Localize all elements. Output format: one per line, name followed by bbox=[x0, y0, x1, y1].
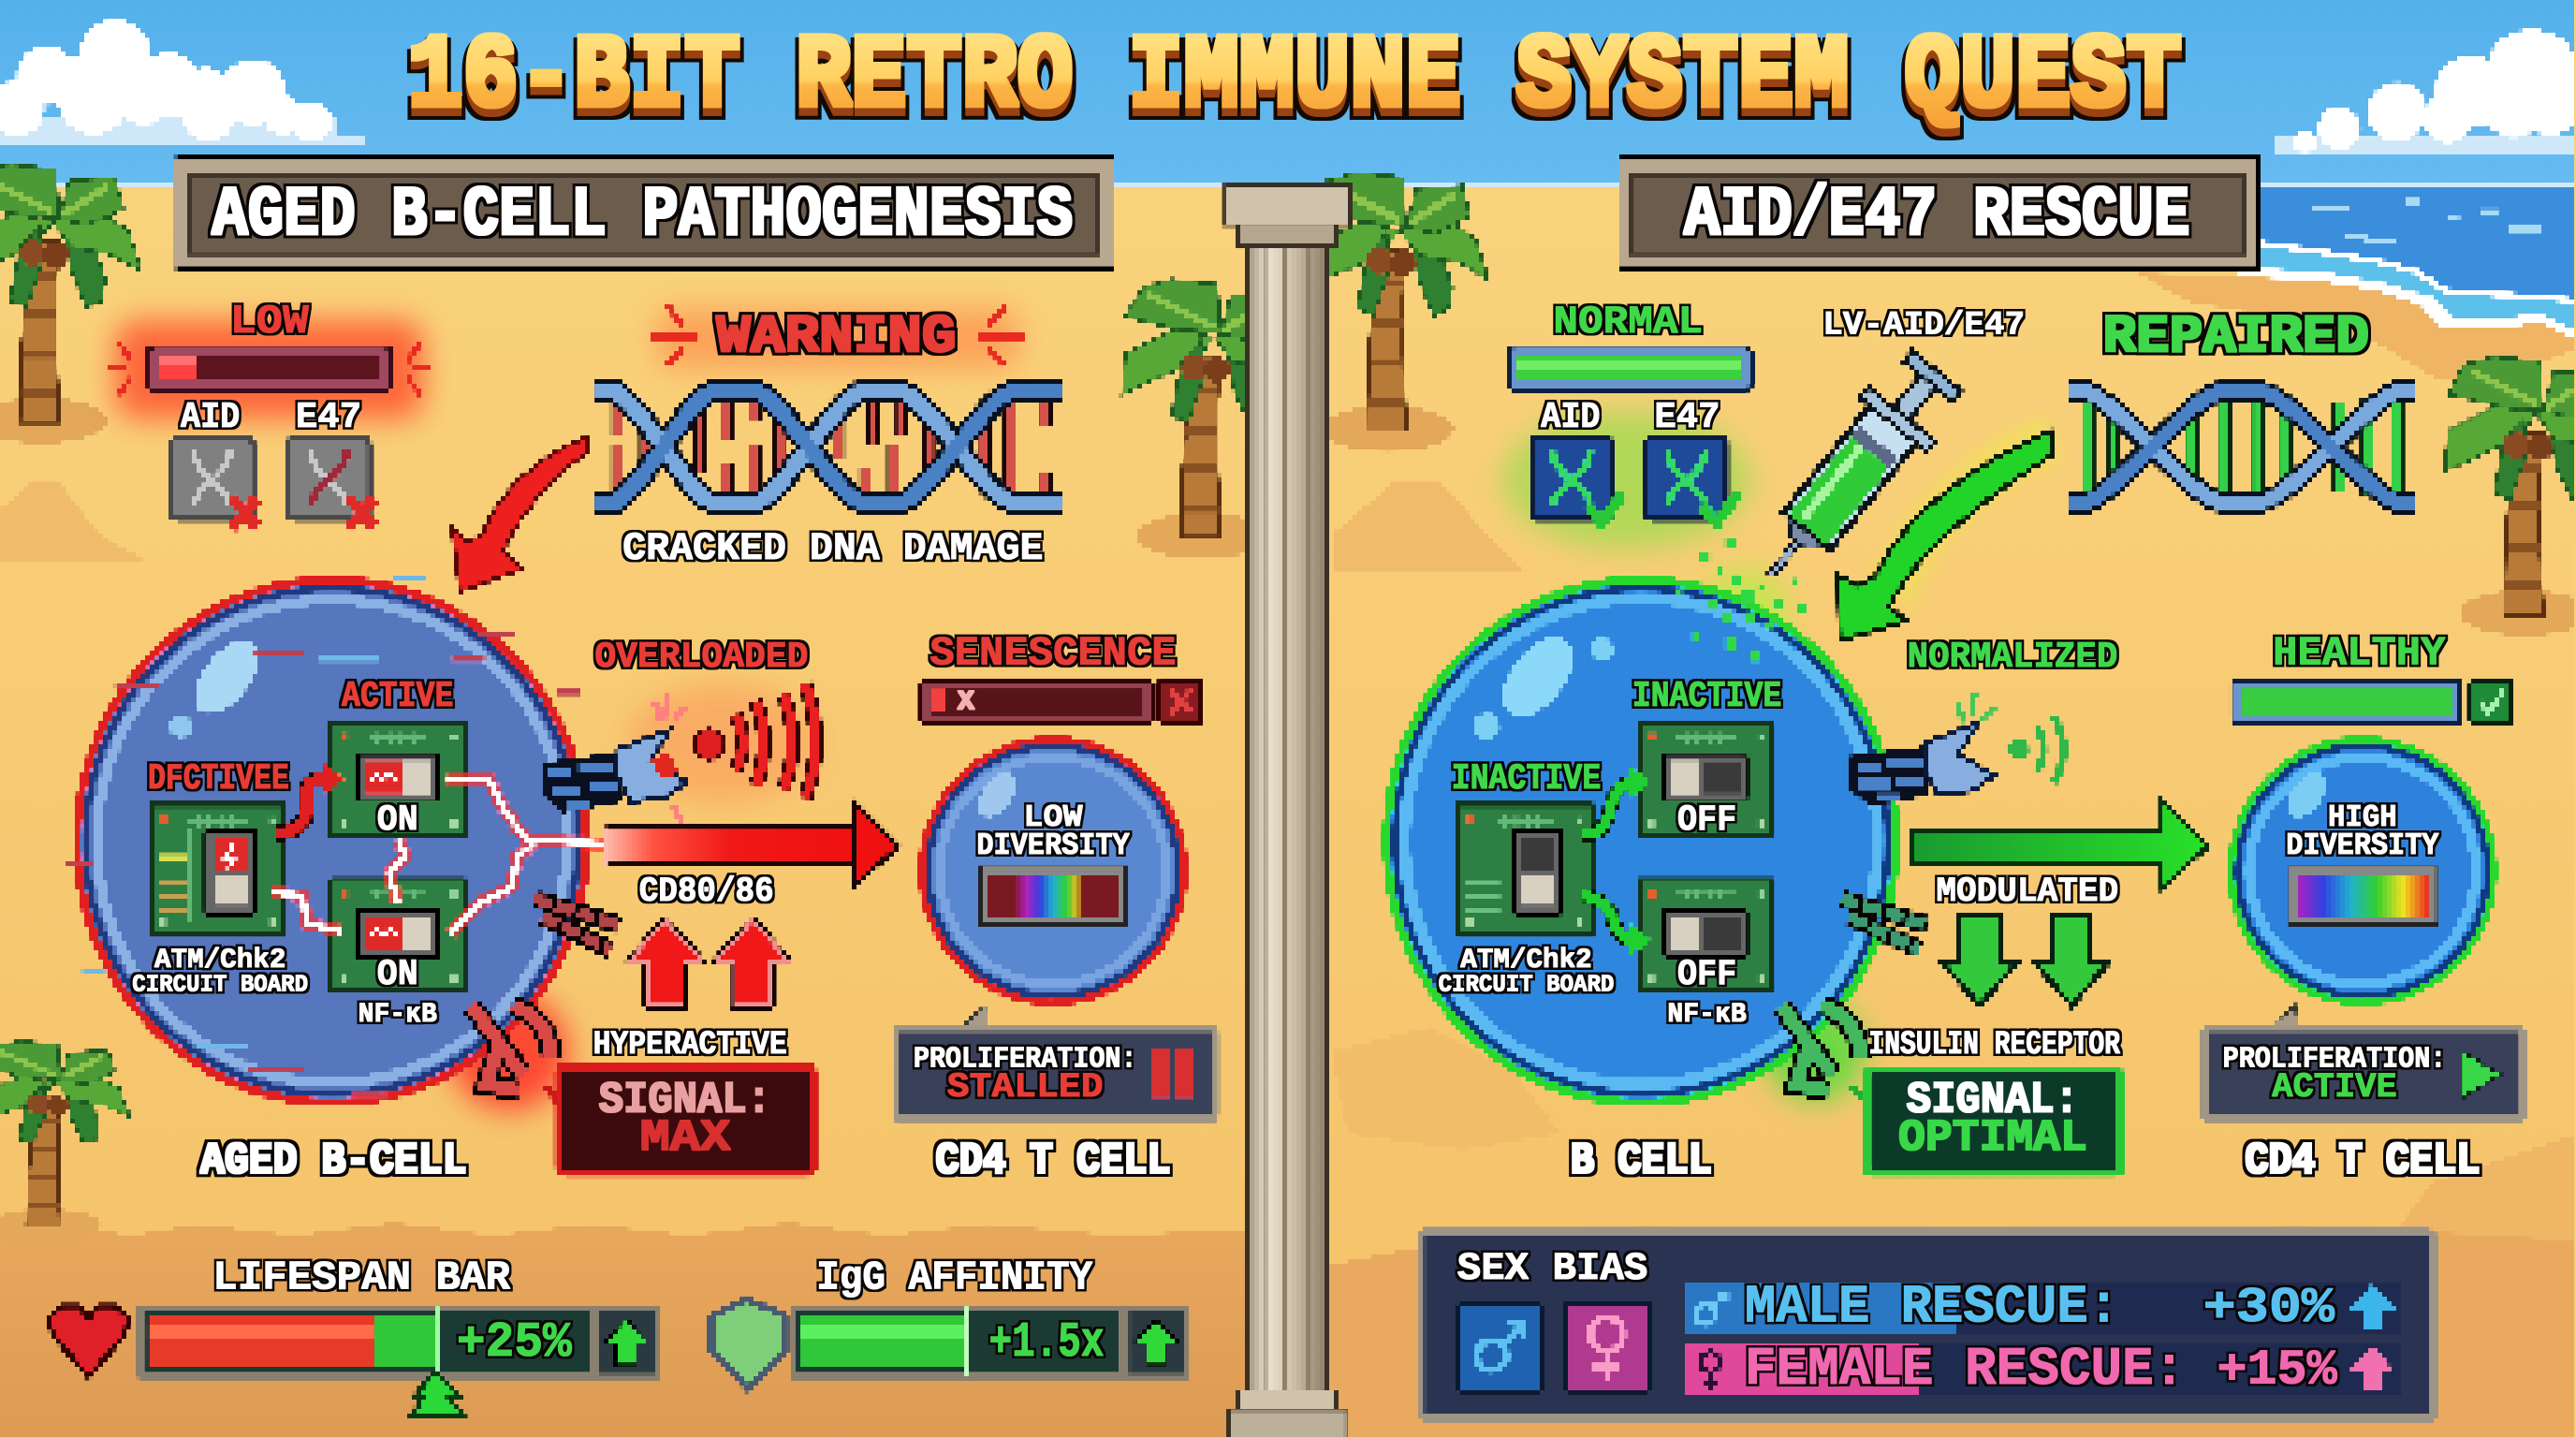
glow: warning bbox=[657, 309, 1018, 368]
cloud left bbox=[0, 20, 365, 144]
glow: restored genes bbox=[1503, 411, 1749, 549]
label: on top: ON bbox=[377, 800, 418, 841]
label: lifespan bar: LIFESPAN BAR bbox=[212, 1255, 511, 1301]
label: e47 right: E47 bbox=[1654, 397, 1720, 438]
circuit board: active on bbox=[329, 721, 468, 838]
icon: e47 gene restored bbox=[1647, 437, 1738, 522]
panel: sex bias bbox=[1421, 1232, 2433, 1418]
icon: aid gene restored bbox=[1531, 437, 1623, 522]
lifespan up indicator bbox=[594, 1308, 657, 1377]
label: b cell: B CELL bbox=[1571, 1137, 1712, 1186]
text: male rescue: MALE RESCUE: bbox=[1745, 1278, 2119, 1339]
label: cd4 t cell left: CD4 T CELL bbox=[936, 1137, 1171, 1186]
cloud right bbox=[2276, 30, 2576, 154]
icon: male bbox=[1459, 1303, 1541, 1392]
healthy cd4 t cell bbox=[2231, 740, 2494, 1003]
dna damage caption: CRACKED DNA DAMAGE bbox=[622, 526, 1043, 571]
receptor modulated bbox=[1841, 899, 1927, 949]
icon: e47 gene off bbox=[287, 437, 374, 527]
aged cd4 t cell bbox=[922, 740, 1184, 1003]
label: healthy: HEALTHY bbox=[2273, 631, 2446, 678]
label: circuit board right: CIRCUIT BOARD bbox=[1439, 970, 1614, 998]
circuit board: nf-kb on bbox=[329, 877, 468, 994]
palm tree top left bbox=[0, 165, 141, 444]
glow: hyperactive receptor bbox=[450, 992, 568, 1110]
pillar bbox=[1225, 185, 1351, 1438]
glow: low meter bbox=[115, 320, 424, 419]
label: cd80/86: CD80/86 bbox=[639, 873, 774, 912]
label: nf-kb right: NF-κB bbox=[1667, 998, 1747, 1030]
red up arrows bbox=[629, 920, 788, 1005]
green down arrows bbox=[1942, 917, 2110, 1005]
label: inactive top: INACTIVE bbox=[1632, 676, 1781, 717]
icon: aid gene off bbox=[171, 437, 258, 527]
label: low: LOW bbox=[230, 299, 310, 345]
text: low: LOW bbox=[1023, 800, 1083, 836]
ground strip left bbox=[0, 1223, 1249, 1438]
aged b-cell bbox=[66, 575, 587, 1103]
low gene expression meter bbox=[109, 342, 431, 394]
cracked dna bbox=[596, 389, 1061, 503]
glow: green arrow bbox=[1889, 437, 2054, 600]
lifespan bar bbox=[139, 1308, 592, 1377]
text: active: ACTIVE bbox=[2272, 1068, 2397, 1108]
label: circuit board: CIRCUIT BOARD bbox=[132, 970, 308, 998]
male rescue row bbox=[1684, 1284, 2402, 1332]
female rescue row bbox=[1684, 1344, 2402, 1397]
red curved arrow bbox=[452, 437, 588, 592]
big green arrow bbox=[1912, 801, 2208, 888]
syringe bbox=[1738, 344, 1969, 602]
text: proliferation left: PROLIFERATION: bbox=[914, 1044, 1137, 1077]
label: senescence: SENESCENCE bbox=[929, 631, 1177, 678]
lightning signal traces bbox=[271, 779, 618, 935]
senescence meter bbox=[922, 681, 1201, 723]
label: warning: WARNING bbox=[716, 307, 956, 367]
text: optimal: OPTIMAL bbox=[1898, 1114, 2087, 1164]
text: proliferation right: PROLIFERATION: bbox=[2223, 1044, 2446, 1077]
palm tree right of pillar bbox=[1308, 172, 1488, 452]
receptor cd80/86 left bbox=[534, 899, 620, 949]
text: diversity right: DIVERSITY bbox=[2286, 829, 2438, 864]
ground strip right bbox=[1327, 1225, 2576, 1438]
healthy b-cell bbox=[1386, 580, 1895, 1103]
label: active: ACTIVE bbox=[342, 676, 453, 717]
label: nf-kb: NF-κB bbox=[359, 998, 437, 1030]
label: atm/chk2 right: ATM/Chk2 bbox=[1460, 944, 1592, 976]
injection particles bbox=[1676, 539, 1806, 662]
text: signal right: SIGNAL: bbox=[1907, 1076, 2079, 1125]
text: high: HIGH bbox=[2328, 800, 2397, 836]
glow: overload waves bbox=[627, 683, 818, 801]
receptor with normal waves bbox=[1850, 694, 2063, 807]
label: overloaded: OVERLOADED bbox=[594, 637, 809, 678]
text: diversity: DIVERSITY bbox=[976, 829, 1130, 864]
label: on bottom: ON bbox=[377, 954, 418, 995]
icon: shield bbox=[711, 1299, 785, 1388]
label: inactive left: INACTIVE bbox=[1452, 758, 1601, 800]
healthy meter bbox=[2232, 681, 2512, 723]
label: aid right: AID bbox=[1541, 397, 1600, 438]
glow: injection bbox=[1702, 568, 1788, 654]
red signal arrow to active switch bbox=[274, 762, 345, 833]
warning sparks bbox=[651, 305, 1025, 365]
igg affinity bar bbox=[794, 1308, 1120, 1377]
label: off bottom: OFF bbox=[1677, 954, 1736, 995]
label: modulated: MODULATED bbox=[1936, 873, 2118, 912]
value: +25%: +25% bbox=[457, 1314, 572, 1371]
title: 16-BIT RETRO IMMUNE SYSTEM QUEST bbox=[407, 25, 2182, 145]
label: igg affinity: IgG AFFINITY bbox=[816, 1255, 1093, 1301]
label: atm/chk2: ATM/Chk2 bbox=[154, 944, 285, 976]
receptor with overload waves bbox=[542, 683, 815, 822]
title: 16-BIT RETRO IMMUNE SYSTEM QUEST bbox=[407, 17, 2182, 137]
hyperactive insulin receptor bbox=[472, 1005, 552, 1091]
text: max: MAX bbox=[640, 1114, 731, 1164]
label: normal: NORMAL bbox=[1553, 300, 1703, 345]
repaired dna bbox=[2069, 391, 2413, 506]
sky background bbox=[0, 0, 2576, 185]
value: +1.5x: +1.5x bbox=[989, 1314, 1104, 1371]
label: insulin receptor: INSULIN RECEPTOR bbox=[1868, 1026, 2121, 1064]
label: defective: DFCTIVEE bbox=[148, 758, 289, 800]
signal optimal box bbox=[1847, 1070, 2121, 1173]
icon: heart bbox=[50, 1306, 128, 1377]
igg up indicator bbox=[1127, 1308, 1188, 1377]
label: cd4 t cell right: CD4 T CELL bbox=[2245, 1137, 2480, 1186]
text: female rescue: FEMALE RESCUE: bbox=[1745, 1340, 2185, 1401]
label: normalized: NORMALIZED bbox=[1908, 637, 2117, 678]
heading: aid/e47 rescue: AID/E47 RESCUE bbox=[1684, 175, 2190, 256]
text: signal: SIGNAL: bbox=[599, 1076, 771, 1125]
label: aged b-cell: AGED B-CELL bbox=[200, 1137, 466, 1186]
circuit board: inactive off bbox=[1636, 721, 1776, 838]
circuit board: atm/chk2 bbox=[148, 801, 287, 938]
title: 16-BIT RETRO IMMUNE SYSTEM QUEST bbox=[407, 25, 2182, 145]
value: +15%: +15% bbox=[2217, 1343, 2337, 1399]
green curved arrow bbox=[1838, 431, 2054, 640]
label: sex bias: SEX BIAS bbox=[1457, 1246, 1647, 1291]
green marker arrow bbox=[411, 1372, 463, 1416]
sea bbox=[0, 181, 2576, 344]
heading: aged b-cell pathogenesis: AGED B-CELL PATHOGENESIS bbox=[212, 175, 1073, 256]
signal max box bbox=[539, 1066, 813, 1173]
icon: female bbox=[1566, 1303, 1649, 1392]
label: e47 left: E47 bbox=[296, 397, 361, 438]
proliferation stalled box bbox=[896, 1005, 1216, 1119]
label: aid left: AID bbox=[181, 397, 240, 438]
value: +30%: +30% bbox=[2203, 1280, 2334, 1336]
proliferation active box bbox=[2204, 1005, 2524, 1119]
text: stalled: STALLED bbox=[947, 1068, 1104, 1108]
header frame: aged b-cell pathogenesis bbox=[174, 156, 1116, 272]
insulin receptor normal bbox=[1781, 1005, 1862, 1091]
label: lv-aid/e47: LV-AID/E47 bbox=[1822, 307, 2025, 345]
text: senescence x: X bbox=[958, 685, 974, 717]
palm tree far right bbox=[2445, 357, 2576, 636]
palm tree left mid bbox=[1119, 276, 1245, 557]
label: repaired: REPAIRED bbox=[2103, 307, 2369, 367]
big red arrow bbox=[603, 801, 899, 886]
label: hyperactive: HYPERACTIVE bbox=[593, 1026, 787, 1064]
header frame: aid/e47 rescue bbox=[1618, 156, 2259, 272]
green modulated arrows between boards bbox=[1580, 766, 1651, 956]
label: off top: OFF bbox=[1677, 800, 1736, 841]
normal gene expression meter bbox=[1508, 346, 1751, 389]
circuit board: atm/chk2 repaired bbox=[1456, 801, 1595, 938]
glow: normal receptor bbox=[1766, 1003, 1865, 1101]
palm tree lower left bbox=[0, 1041, 130, 1242]
circuit board: nf-kb off bbox=[1636, 877, 1776, 994]
